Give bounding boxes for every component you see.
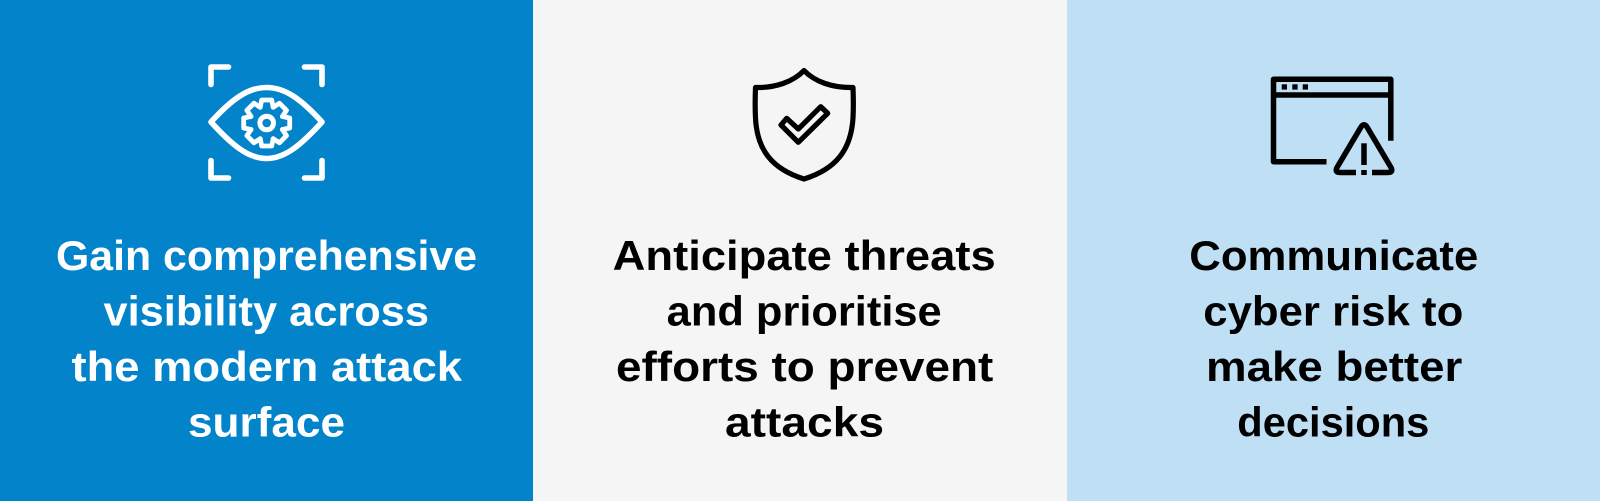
panel: visibility [0,0,533,501]
panel background: light grey [533,0,1067,501]
text: anticipate heading: attacks [725,398,884,446]
text: visibility heading: the modern attack [72,343,463,390]
text: communicate heading: make better [1206,343,1462,390]
text: anticipate heading [613,232,996,446]
text: visibility heading [56,232,477,446]
panel background: light blue [1067,0,1600,501]
text: anticipate heading: Anticipate threats [613,232,996,279]
text: visibility heading: surface [188,398,345,446]
icon: shield with check mark [755,70,853,179]
text: communicate heading [1189,232,1478,446]
panel background: blue [0,0,533,501]
text: communicate heading: decisions [1237,398,1429,446]
icon: browser window with warning triangle [1274,79,1392,175]
panel: anticipate threats [533,0,1067,501]
text: anticipate heading: and prioritise [667,288,942,334]
text: communicate heading: cyber risk to [1203,288,1463,334]
text: visibility heading: Gain comprehensive [56,232,477,279]
text: visibility heading: visibility across [104,288,429,334]
text: communicate heading: Communicate [1189,232,1478,279]
panel: communicate risk [1067,0,1600,501]
text: anticipate heading: efforts to prevent [616,343,993,390]
icon: eye with gear in viewfinder [211,67,322,178]
